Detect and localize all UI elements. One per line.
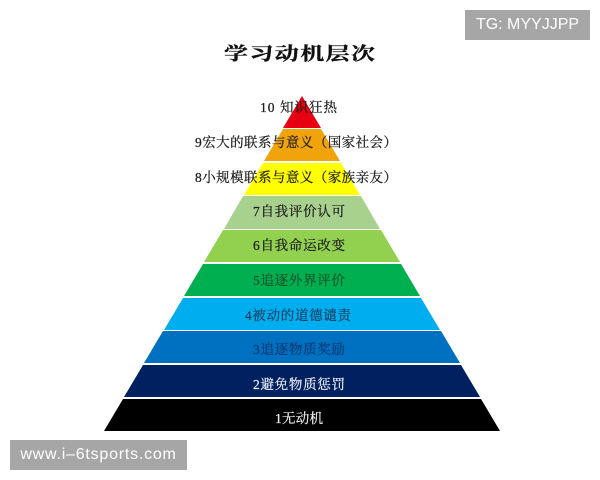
title: 学习动机层次 xyxy=(224,44,375,64)
level 1: no motivation xyxy=(104,399,500,431)
level 5: external evaluation xyxy=(184,264,420,296)
level 9: grand connection and meaning: 9宏大的联系与意义（国家社会） xyxy=(195,134,397,150)
level 1: no motivation: 1无动机 xyxy=(275,410,324,426)
level 6: changing one's fate xyxy=(204,230,400,262)
level 2: avoiding material punishment xyxy=(124,365,480,397)
level 8: small-scale connection and meaning: 8小规模联系与意义（家族亲友） xyxy=(195,169,397,185)
level 3: material reward xyxy=(144,331,460,363)
pyramid xyxy=(104,96,500,431)
level 3: material reward: 3追逐物质奖励 xyxy=(253,341,345,357)
level 8: small-scale connection and meaning xyxy=(195,163,397,195)
level 6: changing one's fate: 6自我命运改变 xyxy=(253,237,346,253)
watermark: TG badge xyxy=(465,10,590,40)
level 7: self-evaluation: 7自我评价认可 xyxy=(253,204,345,219)
level 7: self-evaluation xyxy=(224,196,380,229)
level 10: knowledge passion xyxy=(260,96,338,128)
level 9: grand connection and meaning xyxy=(195,129,397,161)
level 5: external evaluation: 5追逐外界评价 xyxy=(253,273,346,288)
level 2: avoiding material punishment: 2避免物质惩罚 xyxy=(253,376,345,392)
level 4: moral condemnation xyxy=(164,298,440,330)
level 10: knowledge passion: 10 知识狂热 xyxy=(260,99,338,115)
watermark: TG badge: TG: MYYJJPP xyxy=(476,16,579,33)
watermark: website badge xyxy=(10,440,187,470)
watermark: website badge: www.i–6tsports.com xyxy=(20,446,177,463)
level 4: moral condemnation: 4被动的道德谴责 xyxy=(245,307,352,323)
